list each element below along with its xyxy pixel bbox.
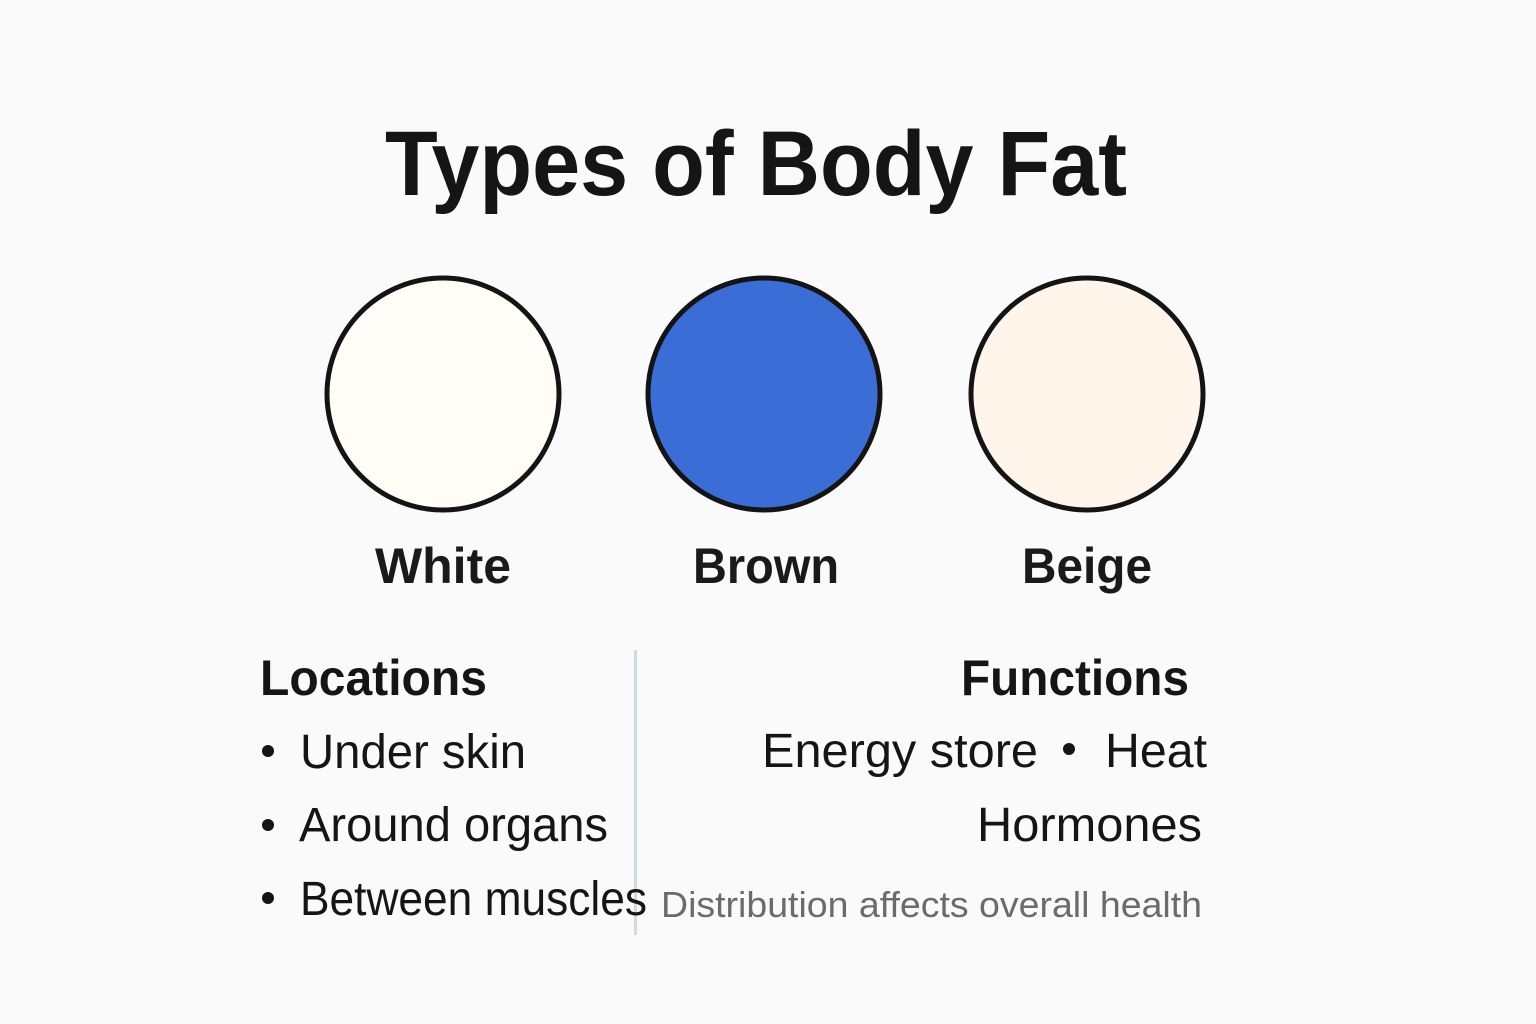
functions list: Hormones	[977, 799, 1202, 852]
divider	[634, 650, 637, 935]
label: white: White	[375, 538, 511, 594]
circle: white fat	[327, 278, 559, 594]
functions list	[762, 725, 1207, 852]
bullet list: Around organs	[299, 799, 608, 852]
panel: functions	[762, 650, 1207, 852]
label: beige: Beige	[1022, 538, 1152, 594]
bullet list: Between muscles	[300, 873, 647, 926]
label: brown: Brown	[693, 538, 839, 594]
heading: functions: Functions	[961, 650, 1189, 706]
functions list: Energy store	[762, 725, 1038, 778]
title: Types of Body Fat	[385, 113, 1127, 215]
circle: beige fat	[971, 278, 1203, 594]
bullet list	[262, 726, 647, 926]
bullet list: Under skin	[300, 726, 526, 779]
functions list: Heat	[1105, 725, 1207, 778]
panel: locations	[260, 650, 647, 926]
circle: brown fat	[648, 278, 880, 594]
heading: locations: Locations	[260, 650, 487, 706]
footnote: Distribution affects overall health	[661, 884, 1202, 925]
